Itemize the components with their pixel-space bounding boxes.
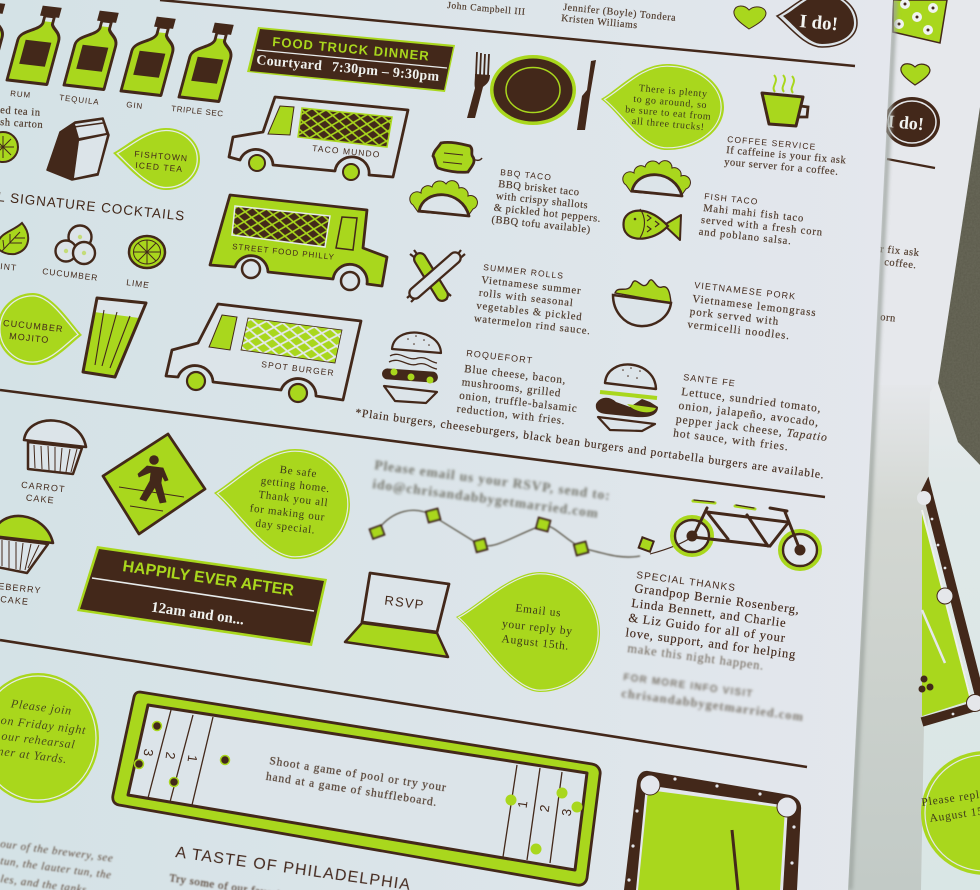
icon: lime [129, 236, 165, 268]
text: special thanks [625, 570, 803, 662]
icon: tin can [639, 537, 692, 554]
icon: heart [734, 6, 766, 29]
bubble: email us: August 15th. [501, 633, 570, 653]
bubble: email us [456, 572, 600, 692]
text: burger footnote: *Plain burgers, cheeseburgers, black bean burgers and portabella burgers are available. [355, 407, 825, 482]
bubble: Fishtown iced tea: FISHTOWN [134, 149, 189, 163]
bubble: cucumber mojito [0, 293, 82, 365]
shuffleboard numbers: 3 [559, 808, 574, 817]
text: iced tea note [0, 105, 44, 131]
text: fish taco: served with a fresh corn [700, 215, 823, 239]
label: blueberry cake [0, 581, 42, 607]
text: summer rolls: rolls with seasonal [478, 288, 574, 309]
text: BBQ taco: (BBQ tofu available) [491, 215, 591, 236]
text: coffee service [724, 134, 847, 178]
bottle labels: TRIPLE SEC [171, 104, 224, 118]
shuffleboard numbers: 2 [163, 751, 178, 760]
text: iced tea note: sh carton [0, 117, 44, 131]
bubble: be safe [214, 449, 350, 559]
guest names [447, 1, 677, 31]
bubble: email us: your reply by [501, 618, 573, 638]
garnish labels: LIME [126, 277, 150, 290]
bubble: be safe: Thank you all [258, 489, 329, 509]
banner: happily ever after [77, 546, 327, 646]
text: more info blurred: chrisandabbygetmarried.com [621, 686, 805, 724]
text: second sheet fragments: orn [880, 312, 897, 325]
text: summer rolls: vegetables & pickled [476, 301, 583, 323]
icon: mojito glass [83, 298, 146, 377]
illustration: shuffleboard [113, 692, 600, 885]
text: Vietnamese pork: vermicelli noodles. [687, 319, 791, 342]
icon: pedestrian crossing sign [103, 434, 205, 534]
guest names: Jennifer (Boyle) Tondera [563, 2, 677, 24]
text: Roquefort [456, 348, 581, 428]
bottle labels: TEQUILA [59, 93, 100, 107]
truck: Spot Burger: SPOT BURGER [261, 359, 335, 378]
icon: tandem bicycle [672, 500, 820, 569]
bubble: cucumber mojito: MOJITO [9, 331, 50, 345]
text: make this night happen: make this night happen. [627, 641, 765, 673]
text: second sheet fragments: r fix ask [880, 244, 920, 259]
icon: knife [577, 60, 596, 130]
bubble: rehearsal dinner: Please join [9, 696, 73, 718]
illustration: shuffleboard: Shoot a game of pool or try your [269, 755, 448, 794]
text: special thanks: & Liz Guido for all of your [628, 611, 787, 645]
text: summer rolls: watermelon rind sauce. [473, 313, 591, 337]
text: fish taco [698, 191, 825, 251]
text: Vietnamese pork: VIETNAMESE PORK [694, 280, 797, 302]
text: special thanks: Linda Bennett, and Charlie [631, 596, 787, 630]
icon: mint leaf [0, 223, 28, 254]
bubble: plenty to go around: all three trucks! [631, 116, 705, 133]
text: summer rolls [473, 262, 596, 337]
text: Vietnamese pork [687, 280, 817, 345]
section rules [0, 0, 855, 767]
banner: happily ever after: HAPPILY EVER AFTER [121, 558, 295, 600]
bubble: plenty to go around [601, 64, 724, 150]
garnish labels: CUCUMBER [42, 266, 99, 283]
text: Roquefort: onion, truffle-balsamic [459, 390, 578, 415]
icon: RSVP laptop [345, 573, 449, 657]
text: more info blurred: FOR MORE INFO VISIT [623, 672, 754, 700]
text: special thanks: Grandpop Bernie Rosenberg, [634, 581, 801, 617]
truck: Taco Mundo: TACO MUNDO [312, 143, 381, 160]
truck: Street Food Philly: STREET FOOD PHILLY [232, 242, 335, 262]
blurred RSVP instruction: Please email us your RSVP, send to: [374, 457, 612, 503]
text: second sheet fragments: coffee. [884, 257, 917, 271]
truck: Taco Mundo [229, 97, 408, 180]
garnish labels [0, 261, 150, 290]
icon: fish [623, 209, 681, 240]
label: carrot cake [21, 480, 66, 506]
text: iced tea note: ed tea in [0, 105, 41, 119]
bubble: Fishtown iced tea: ICED TEA [135, 160, 184, 174]
bubble: rehearsal dinner [0, 673, 99, 803]
bubble: plenty to go around: be sure to eat from [625, 104, 712, 123]
text: second sheet fragments [880, 244, 920, 325]
text: brewery tour: tun, the lauter tun, the [0, 855, 112, 882]
shuffleboard numbers: 1 [515, 800, 530, 809]
truck: Street Food Philly [210, 195, 387, 290]
shuffleboard numbers [141, 748, 574, 817]
bubble: third sheet reply [921, 751, 980, 875]
banner: food truck dinner [247, 27, 455, 92]
bubble: be safe: day special. [255, 517, 316, 537]
shadow at main sheet edge [850, 0, 895, 890]
bottle labels: RUM [10, 89, 31, 100]
text: Sante Fe [673, 372, 832, 458]
text: Sante Fe: Lettuce, sundried tomato, [681, 386, 822, 415]
background: second sheet [840, 0, 980, 890]
badge: second sheet I do: I do! [887, 111, 925, 134]
icon: Sante Fe burger [596, 364, 658, 431]
string and cans [370, 509, 640, 557]
label: carrot cake: CARROT [21, 480, 66, 494]
icon: lime slice [0, 132, 18, 162]
icon: taco [410, 181, 477, 216]
illustration: pool table [624, 771, 801, 890]
text: BBQ taco: BBQ TACO [500, 167, 553, 182]
bubble: Fishtown iced tea [113, 128, 200, 190]
icon: carrot cupcake [24, 421, 86, 474]
icon: plate [490, 55, 576, 125]
shuffleboard pucks [134, 722, 582, 854]
guest names: John Campbell III [447, 1, 526, 18]
badge: I do [777, 0, 857, 47]
text: special thanks: love, support, and for helping [625, 625, 797, 662]
icon: blueberry cupcake [0, 516, 53, 573]
text: BBQ taco [491, 167, 604, 237]
bubble: be safe: getting home. [260, 475, 331, 495]
text: brewery tour [0, 838, 114, 890]
icon: BBQ taco sandwich [433, 142, 482, 172]
truck: Spot Burger [166, 304, 361, 402]
text: Roquefort: ROQUEFORT [466, 348, 534, 366]
bubble: be safe: Be safe [279, 464, 318, 480]
label: carrot cake: CAKE [25, 493, 55, 506]
bubble: rehearsal dinner: on Friday night [0, 713, 87, 737]
bubble: cucumber mojito: CUCUMBER [3, 318, 64, 334]
illustration: shuffleboard: hand at a game of shuffleboard. [265, 771, 438, 809]
badge: I do: I do! [799, 11, 839, 35]
icon: second sheet heart [901, 64, 930, 85]
bubble: be safe: for making our [249, 502, 326, 524]
icon: flower pattern card [893, 0, 947, 43]
text: Roquefort: reduction, with fries. [456, 403, 566, 427]
icon: coffee cup [762, 75, 808, 126]
shuffleboard numbers: 1 [185, 754, 200, 763]
text: Sante Fe: hot sauce, with fries. [673, 427, 790, 453]
text: fish taco: FISH TACO [704, 191, 759, 207]
text: BBQ taco: with crispy shallots [495, 191, 589, 212]
text: summer rolls: Vietnamese summer [481, 275, 582, 297]
bottle labels: GIN [126, 100, 144, 111]
text: Roquefort: mushrooms, grilled [461, 376, 562, 400]
bubble: email us: Email us [515, 602, 562, 620]
text: coffee service: If caffeine is your fix ask [726, 145, 847, 167]
icon: Vietnamese pork bowl [613, 280, 671, 326]
icons: liquor bottles [0, 0, 239, 102]
text: brewery tour: our of the brewery, see [0, 838, 114, 865]
text: Roquefort: Blue cheese, bacon, [464, 363, 567, 387]
text: coffee service: your server for a coffee. [724, 157, 839, 178]
text: Vietnamese pork: pork served with [689, 306, 780, 328]
heading: signature cocktails: L SIGNATURE COCKTAILS [0, 189, 186, 224]
bubble: plenty to go around: There is plenty [638, 83, 708, 100]
badge: second sheet I do [884, 97, 940, 147]
icon: summer rolls [407, 250, 465, 302]
text: special thanks: SPECIAL THANKS [636, 570, 737, 594]
text: BBQ taco: & pickled hot peppers. [493, 203, 601, 225]
icon: fork [467, 52, 490, 118]
blurred RSVP instruction: ido@chrisandabbygetmarried.com [372, 476, 600, 521]
text: Sante Fe: pepper jack cheese, Tapatio [675, 414, 829, 444]
text: coffee service: COFFEE SERVICE [727, 134, 817, 152]
shuffleboard numbers: 2 [537, 804, 552, 813]
shuffleboard numbers: 3 [141, 748, 156, 757]
icon: cucumber slices [56, 226, 95, 264]
banner: happily ever after: 12am and on... [150, 600, 245, 629]
guest names: Kristen Williams [561, 13, 638, 31]
text: BBQ taco: BBQ brisket taco [498, 179, 580, 199]
banner: food truck dinner: FOOD TRUCK DINNER [272, 34, 430, 64]
bubble: plenty to go around: to go around, so [633, 94, 708, 111]
icon: milk carton [47, 118, 109, 180]
text: fish taco: and poblano salsa. [698, 227, 792, 247]
icon: taco two [623, 161, 690, 196]
bottle labels [10, 89, 224, 118]
icon: RSVP laptop: RSVP [384, 593, 425, 612]
illustration: third sheet pool table [917, 490, 980, 722]
text: fish taco: Mahi mahi fish taco [703, 203, 805, 225]
garnish labels: INT [0, 261, 18, 273]
text: Vietnamese pork: Vietnamese lemongrass [692, 293, 817, 319]
label: blueberry cake: CAKE [0, 594, 30, 607]
banner: food truck dinner: Courtyard 7:30pm – 9:30pm [256, 53, 440, 85]
text: summer rolls: SUMMER ROLLS [483, 262, 565, 281]
bubble: rehearsal dinner: our rehearsal [1, 729, 76, 752]
text: Sante Fe: SANTE FE [683, 372, 736, 388]
text: Sante Fe: onion, jalapeño, avocado, [678, 400, 820, 429]
icon: Roquefort burger [382, 333, 441, 403]
